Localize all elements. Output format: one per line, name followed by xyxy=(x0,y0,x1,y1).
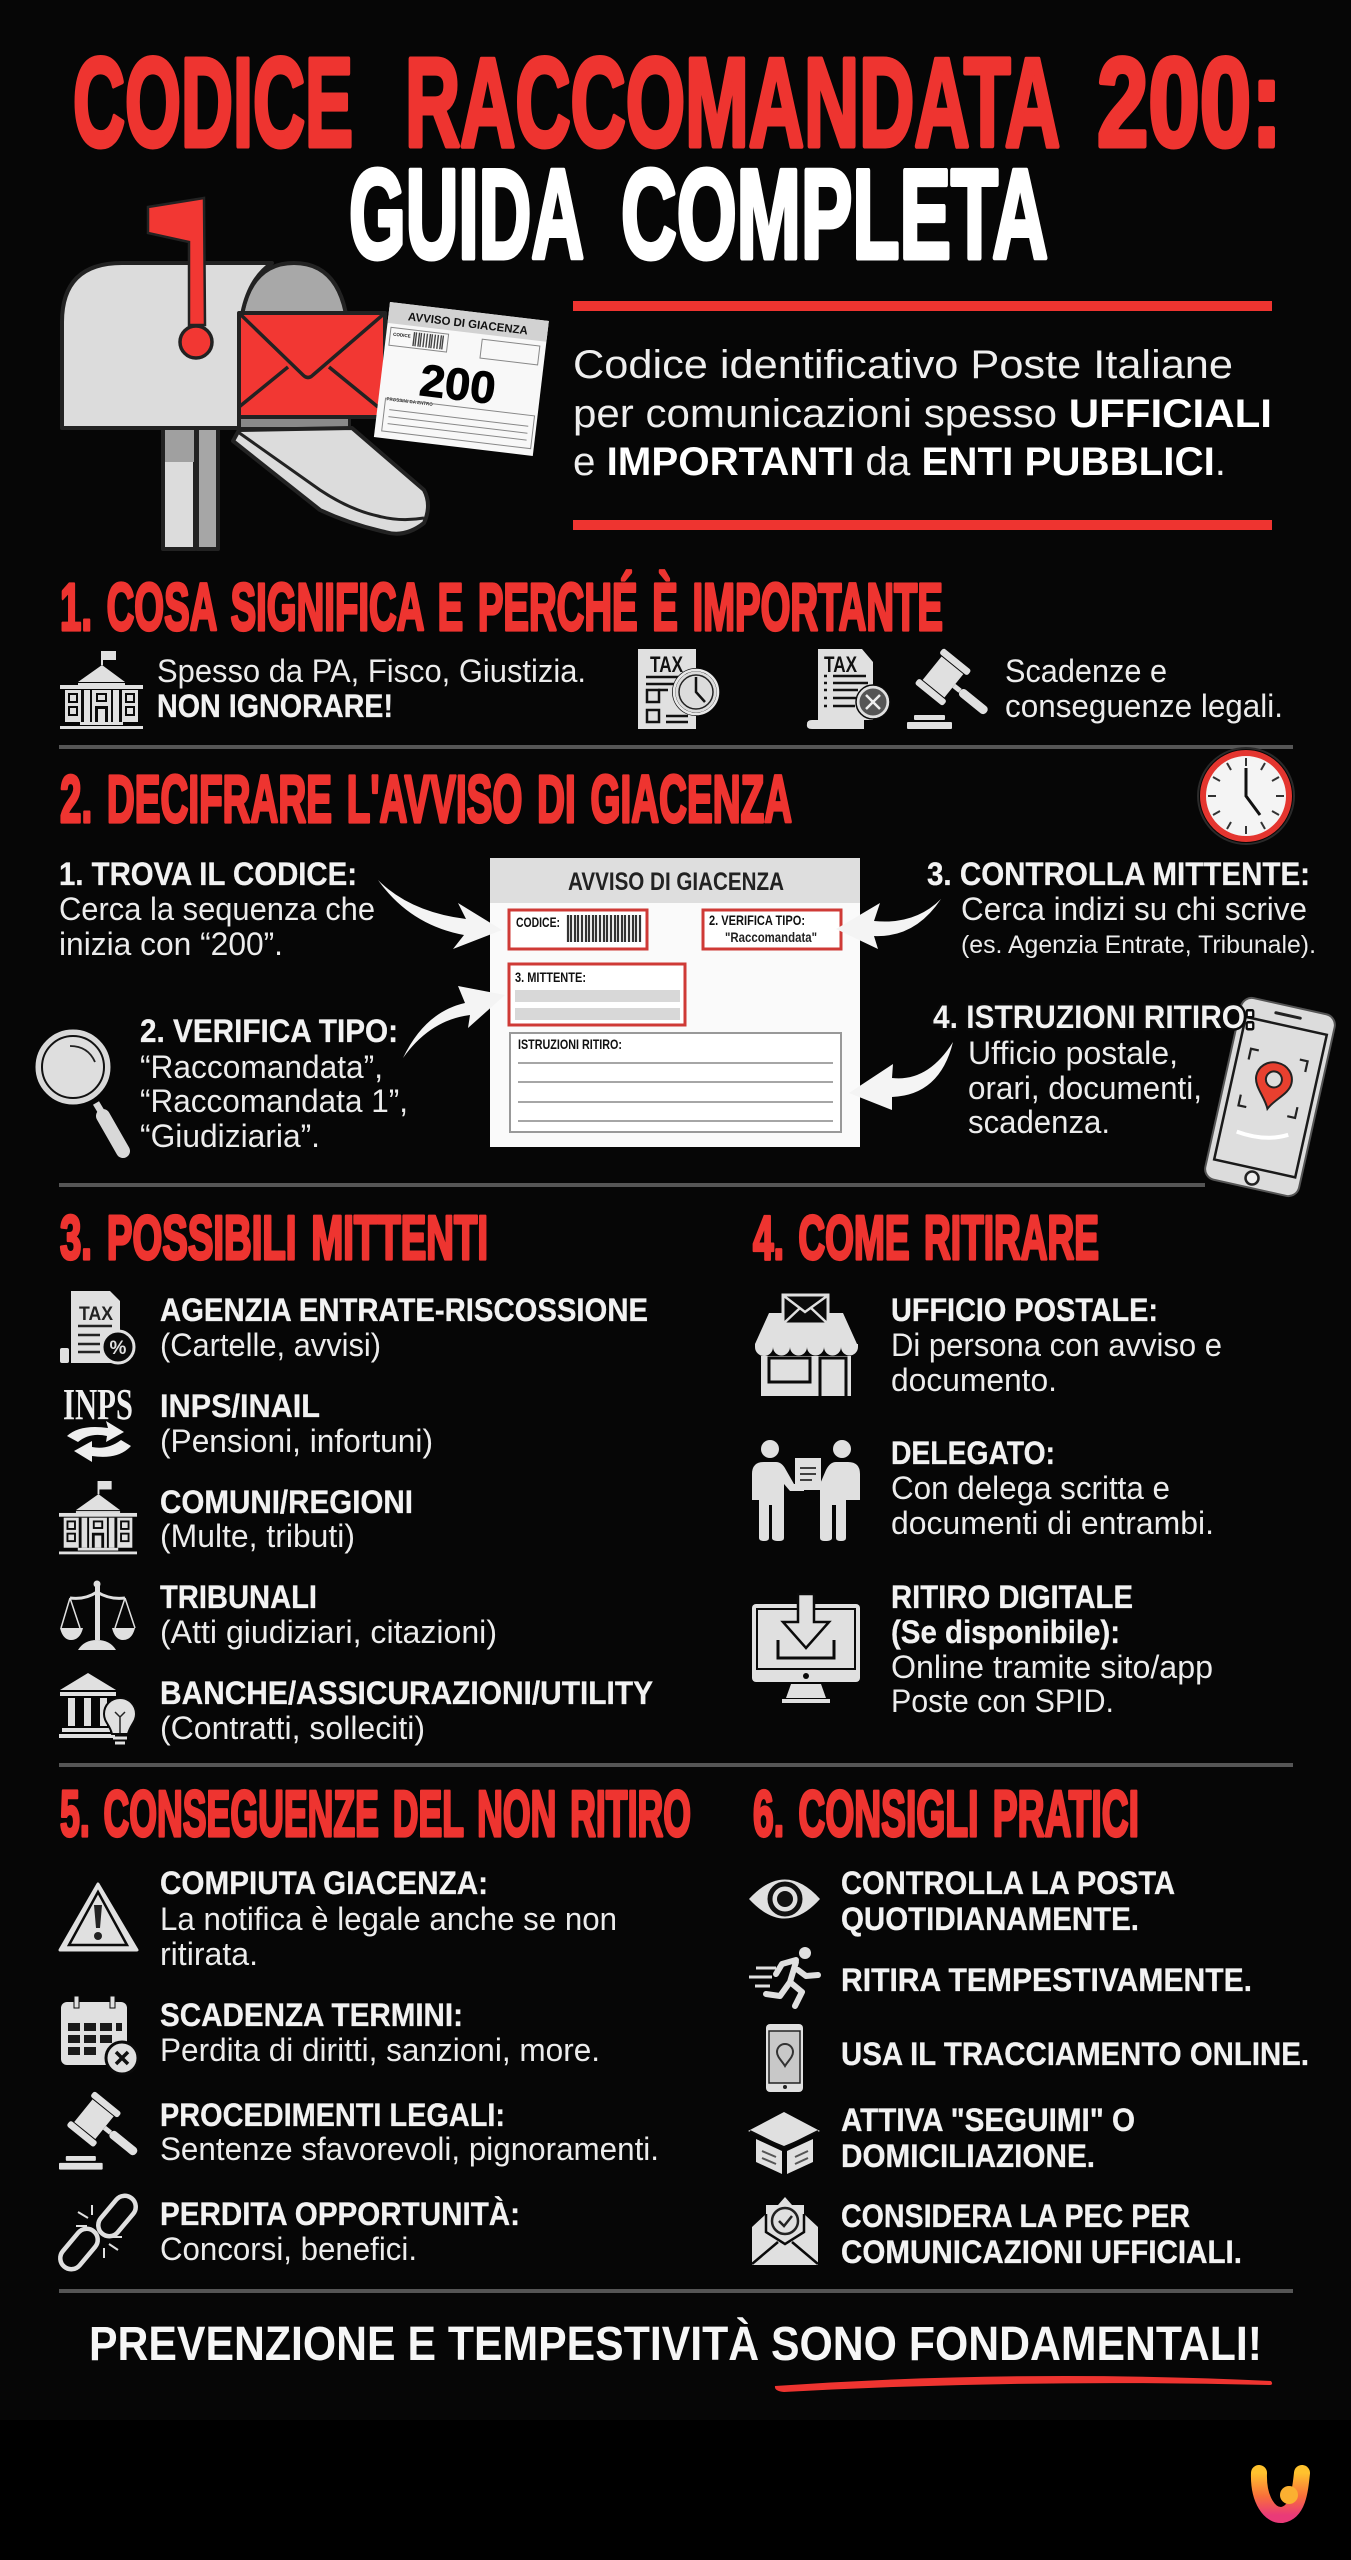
text: step 2: “Giudiziaria”. xyxy=(140,1118,320,1154)
text: delegato: Con delega scritta e xyxy=(891,1470,1170,1506)
text: seguimi xyxy=(841,2102,1135,2174)
notice form: AVVISO DI GIACENZA xyxy=(568,868,784,896)
text: deadlines xyxy=(1005,653,1283,724)
text: scadenza: SCADENZA TERMINI: xyxy=(160,1997,463,2033)
heading 2: 2. DECIFRARE L'AVVISO DI GIACENZA xyxy=(60,762,792,837)
text: scadenza: Perdita di diritti, sanzioni, more. xyxy=(160,2032,600,2068)
panel: section 3 xyxy=(59,1204,653,1746)
icon: phone with pin xyxy=(1203,996,1337,1198)
arrow to istruzioni xyxy=(849,1042,953,1110)
icon: calendar xyxy=(61,1996,138,2074)
title: 200: xyxy=(1097,32,1282,173)
text: pec: CONSIDERA LA PEC PER xyxy=(841,2198,1190,2234)
text: comuni: (Multe, tributi) xyxy=(160,1518,355,1554)
text: tribunali xyxy=(160,1579,497,1650)
text: scadenza xyxy=(160,1997,600,2068)
intro text xyxy=(573,301,1272,530)
text: step 2: “Raccomandata 1”, xyxy=(140,1083,408,1119)
text: step 3 xyxy=(927,856,1316,959)
text: public sources: Spesso da PA, Fisco, Giustizia. xyxy=(157,653,586,689)
icon: scales xyxy=(60,1580,135,1650)
panel: section 6 xyxy=(748,1777,1309,2270)
text: step 1: inizia con “200”. xyxy=(59,926,283,962)
text: public sources xyxy=(157,653,586,724)
field: mittente xyxy=(509,964,685,1025)
text: procedimenti: PROCEDIMENTI LEGALI: xyxy=(160,2097,505,2133)
text: ritiro digitale: Poste con SPID. xyxy=(891,1683,1114,1719)
icon: eye xyxy=(749,1880,820,1918)
text: deadlines: conseguenze legali. xyxy=(1005,688,1283,724)
icon: mailbox with envelope and notice: CODICE xyxy=(393,332,411,339)
icon: tax document with clock xyxy=(638,649,720,729)
arrow to mittente xyxy=(403,986,505,1058)
icon: INPS: INPS xyxy=(63,1380,133,1429)
text: inps xyxy=(160,1388,433,1459)
notice form xyxy=(490,858,860,1147)
intro text: e IMPORTANTI da ENTI PUBBLICI. xyxy=(573,440,1226,484)
text: seguimi: ATTIVA "SEGUIMI" O xyxy=(841,2102,1135,2138)
title: CODICE xyxy=(73,32,353,173)
text: step 2: 2. VERIFICA TIPO: xyxy=(140,1013,398,1049)
text: controlla: QUOTIDIANAMENTE. xyxy=(841,1901,1139,1937)
text: controlla: CONTROLLA LA POSTA xyxy=(841,1865,1175,1901)
text: public sources: NON IGNORARE! xyxy=(157,688,393,724)
icon: town hall xyxy=(59,1481,137,1554)
intro text: Codice identificativo Poste Italiane xyxy=(573,343,1233,387)
icon: mailbox with envelope and notice: PROSSIMI DA ENTRO xyxy=(386,396,434,407)
logo xyxy=(1259,2473,1302,2515)
arrow to codice xyxy=(378,880,502,949)
text: ritiro digitale: Online tramite sito/app xyxy=(891,1649,1213,1685)
intro text: per comunicazioni spesso UFFICIALI xyxy=(573,392,1272,436)
text: ufficio: Di persona con avviso e xyxy=(891,1327,1222,1363)
text: seguimi: DOMICILIAZIONE. xyxy=(841,2138,1095,2174)
icon: tax document with cross: TAX xyxy=(824,652,857,677)
text: ritiro digitale xyxy=(891,1579,1213,1719)
text: ufficio: UFFICIO POSTALE: xyxy=(891,1292,1158,1328)
text: step 1: 1. TROVA IL CODICE: xyxy=(59,856,357,892)
icon: gavel xyxy=(59,2091,150,2171)
text: deadlines: Scadenze e xyxy=(1005,653,1167,689)
footer message xyxy=(89,2317,1272,2392)
icon: gavel xyxy=(907,648,1001,730)
icon: warning xyxy=(60,1884,137,1950)
icon: tax document with cross xyxy=(807,649,890,729)
text: tribunali: (Atti giudiziari, citazioni) xyxy=(160,1614,497,1650)
text: step 3: Cerca indizi su chi scrive xyxy=(961,891,1307,927)
text: tribunali: TRIBUNALI xyxy=(160,1579,317,1615)
heading 3: 3. POSSIBILI MITTENTI xyxy=(60,1204,488,1273)
icon: clock xyxy=(1198,748,1294,844)
text: agenzia: (Cartelle, avvisi) xyxy=(160,1327,381,1363)
text: inps: INPS/INAIL xyxy=(160,1388,320,1424)
text: inps: (Pensioni, infortuni) xyxy=(160,1423,433,1459)
text: ritira: RITIRA TEMPESTIVAMENTE. xyxy=(841,1962,1252,1998)
icon: magnifier xyxy=(38,1032,123,1151)
text: step 1: Cerca la sequenza che xyxy=(59,891,375,927)
text: procedimenti: Sentenze sfavorevoli, pignoramenti. xyxy=(160,2131,659,2167)
title: COMPLETA xyxy=(621,143,1048,285)
icon: INPS xyxy=(63,1380,133,1462)
icon: tracking phone xyxy=(766,2024,803,2092)
text: step 3: (es. Agenzia Entrate, Tribunale). xyxy=(961,931,1316,959)
text: delegato: DELEGATO: xyxy=(891,1435,1055,1471)
text: ufficio: documento. xyxy=(891,1362,1057,1398)
text: banche: (Contratti, solleciti) xyxy=(160,1710,425,1746)
title: GUIDA xyxy=(349,143,584,285)
icon: broken chain xyxy=(56,2191,140,2274)
text: agenzia: AGENZIA ENTRATE-RISCOSSIONE xyxy=(160,1292,648,1328)
icon: runner xyxy=(749,1947,818,2006)
text: compiuta giacenza: La notifica è legale anche se non xyxy=(160,1901,617,1937)
text: compiuta giacenza xyxy=(160,1865,617,1972)
text: ritiro digitale: (Se disponibile): xyxy=(891,1614,1120,1650)
text: step 4: scadenza. xyxy=(968,1104,1110,1140)
text: agenzia xyxy=(160,1292,648,1363)
text: step 4: Ufficio postale, xyxy=(968,1035,1178,1071)
icon: box xyxy=(748,2112,820,2174)
icon: public building xyxy=(60,651,143,729)
panel: section 1 xyxy=(60,570,1283,730)
field: tipo: "Raccomandata" xyxy=(725,929,817,945)
text: comuni: COMUNI/REGIONI xyxy=(160,1484,413,1520)
text: step 4 xyxy=(933,999,1255,1140)
icon: tax percent: TAX xyxy=(79,1304,113,1325)
icon: computer download xyxy=(752,1594,860,1703)
heading 4: 4. COME RITIRARE xyxy=(753,1204,1099,1273)
text: comuni xyxy=(160,1484,413,1554)
text: controlla xyxy=(841,1865,1175,1937)
text: tracciamento: USA IL TRACCIAMENTO ONLINE. xyxy=(841,2036,1309,2072)
text: step 4: 4. ISTRUZIONI RITIRO: xyxy=(933,999,1255,1035)
text: procedimenti xyxy=(160,2097,659,2167)
icon: post office xyxy=(755,1295,858,1396)
text: step 2: “Raccomandata”, xyxy=(140,1049,383,1085)
text: step 2 xyxy=(140,1013,408,1154)
text: perdita: PERDITA OPPORTUNITÀ: xyxy=(160,2196,520,2232)
field: tipo: 2. VERIFICA TIPO: xyxy=(709,912,805,928)
field: istruzioni: ISTRUZIONI RITIRO: xyxy=(518,1036,622,1052)
icon: tax percent: % xyxy=(110,1338,127,1359)
title xyxy=(73,32,1282,285)
text: delegato: documenti di entrambi. xyxy=(891,1505,1214,1541)
field: codice xyxy=(509,910,647,949)
panel: section 4 xyxy=(752,1204,1222,1719)
field: istruzioni xyxy=(510,1033,841,1132)
text: compiuta giacenza: COMPIUTA GIACENZA: xyxy=(160,1865,488,1901)
icon: people handing document xyxy=(752,1440,860,1541)
text: pec: COMUNICAZIONI UFFICIALI. xyxy=(841,2234,1242,2270)
icon: certified mail xyxy=(752,2197,818,2265)
icon: mailbox with envelope and notice: AVVISO DI GIACENZA xyxy=(407,311,528,337)
icon: tax percent xyxy=(60,1291,134,1363)
text: banche xyxy=(160,1675,653,1746)
text: perdita: Concorsi, benefici. xyxy=(160,2231,417,2267)
icon: bank with bulb xyxy=(59,1673,136,1743)
text: step 3: 3. CONTROLLA MITTENTE: xyxy=(927,856,1310,892)
icon: mailbox with envelope and notice: 200 xyxy=(417,354,499,414)
text: ritiro digitale: RITIRO DIGITALE xyxy=(891,1579,1133,1615)
text: delegato xyxy=(891,1435,1214,1541)
heading 5: 5. CONSEGUENZE DEL NON RITIRO xyxy=(60,1777,691,1850)
text: compiuta giacenza: ritirata. xyxy=(160,1936,258,1972)
text: step 1 xyxy=(59,856,375,962)
field: codice: CODICE: xyxy=(516,914,560,930)
field: mittente: 3. MITTENTE: xyxy=(515,969,586,985)
text: step 4: orari, documenti, xyxy=(968,1070,1202,1106)
text: perdita xyxy=(160,2196,520,2267)
icon: tax document with clock: TAX xyxy=(650,652,683,677)
field: tipo xyxy=(703,910,841,949)
icon: mailbox with envelope and notice xyxy=(62,198,549,549)
text: pec xyxy=(841,2198,1242,2270)
panel: section 5 xyxy=(56,1777,691,2274)
panel: section 2 xyxy=(38,748,1337,1198)
arrow to tipo xyxy=(836,899,941,949)
text: ufficio xyxy=(891,1292,1222,1398)
text: banche: BANCHE/ASSICURAZIONI/UTILITY xyxy=(160,1675,653,1711)
